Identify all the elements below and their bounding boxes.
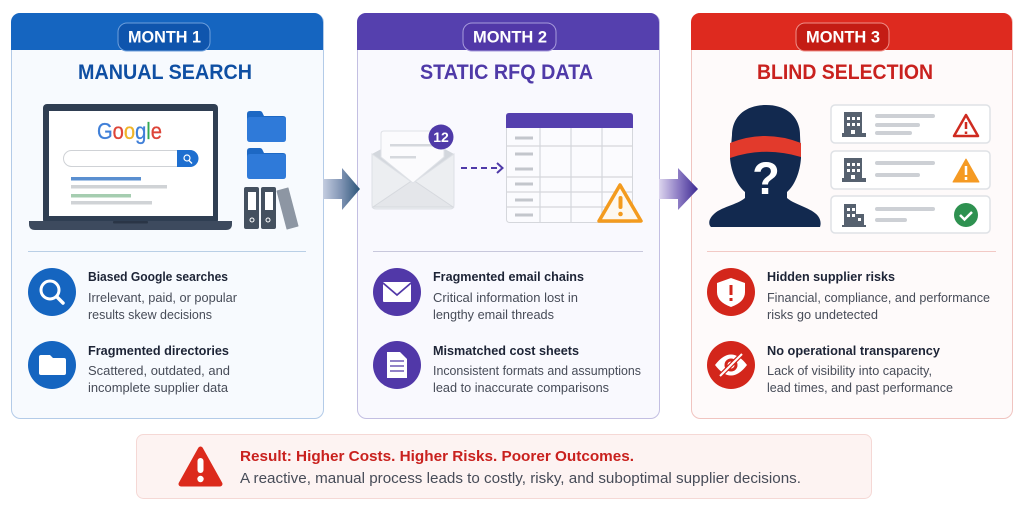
- arrow: dashed to spreadsheet: [461, 163, 502, 173]
- illustration: blindfolded person: [709, 105, 821, 227]
- panel: month 2: [357, 13, 660, 418]
- item: fragmented email chains: [373, 268, 584, 322]
- item: no operational transparency: Lack of visibility into capacity,: [767, 364, 932, 378]
- item: fragmented email chains: lengthy email threads: [433, 308, 554, 322]
- result description: A reactive, manual process leads to costly, risky, and suboptimal supplier decisions.: [240, 470, 801, 487]
- month 3 badge: [796, 23, 889, 51]
- month 2 badge: [463, 23, 556, 51]
- illustration: blindfolded person: ?: [752, 153, 780, 204]
- arrow: month 2 to month 3: [659, 168, 698, 210]
- item: no operational transparency: [707, 341, 953, 395]
- illustration: envelope with 12 messages: [372, 124, 454, 209]
- item: hidden supplier risks: Financial, compliance, and performance: [767, 291, 990, 305]
- item: mismatched cost sheets: Mismatched cost sheets: [433, 343, 579, 358]
- item: biased Google searches: results skew decisions: [88, 308, 212, 322]
- item: hidden supplier risks: [707, 268, 990, 322]
- icon: folders: [247, 111, 286, 179]
- item: no operational transparency: lead times, and past performance: [767, 381, 953, 395]
- month 3 badge: MONTH 3: [806, 28, 880, 46]
- item: biased Google searches: Biased Google searches: [88, 269, 228, 284]
- item: mismatched cost sheets: lead to inaccurate comparisons: [433, 381, 609, 395]
- illustration: envelope with 12 messages: 12: [433, 129, 449, 145]
- heading: static RFQ data: STATIC RFQ DATA: [420, 61, 593, 84]
- item: fragmented directories: incomplete supplier data: [88, 381, 228, 395]
- supplier card: low risk: [831, 196, 990, 233]
- icon: binders: [244, 187, 298, 229]
- item: no operational transparency: No operational transparency: [767, 343, 941, 358]
- item: fragmented directories: [28, 341, 230, 395]
- item: fragmented directories: Fragmented directories: [88, 343, 229, 358]
- month 2 badge: MONTH 2: [473, 28, 547, 46]
- heading: blind selection: BLIND SELECTION: [757, 61, 933, 84]
- illustration: spreadsheet with warning: [506, 113, 641, 223]
- item: fragmented email chains: Fragmented email chains: [433, 269, 584, 284]
- illustration: laptop with Google search: Google: [97, 118, 162, 144]
- month 1 badge: [118, 23, 210, 51]
- item: biased Google searches: Irrelevant, paid, or popular: [88, 291, 237, 305]
- result banner: [136, 434, 872, 498]
- icon: warning triangle: [181, 449, 220, 484]
- illustration: laptop with Google search: [29, 104, 232, 230]
- supplier card: high risk: [831, 105, 990, 143]
- item: fragmented email chains: Critical information lost in: [433, 291, 578, 305]
- result heading: Result: Higher Costs. Higher Risks. Poorer Outcomes.: [240, 448, 634, 465]
- item: hidden supplier risks: Hidden supplier risks: [767, 269, 895, 284]
- arrow: month 1 to month 2: [323, 168, 360, 210]
- heading: manual search: MANUAL SEARCH: [78, 61, 252, 84]
- item: fragmented directories: Scattered, outdated, and: [88, 364, 230, 378]
- item: mismatched cost sheets: Inconsistent formats and assumptions: [433, 364, 641, 378]
- month 1 badge: MONTH 1: [128, 28, 201, 46]
- panel: month 1: [11, 13, 324, 418]
- item: biased Google searches: [28, 268, 237, 322]
- item: hidden supplier risks: risks go undetected: [767, 308, 878, 322]
- item: mismatched cost sheets: [373, 341, 641, 395]
- panel: month 3: [691, 13, 1012, 418]
- supplier card: medium risk: [831, 151, 990, 189]
